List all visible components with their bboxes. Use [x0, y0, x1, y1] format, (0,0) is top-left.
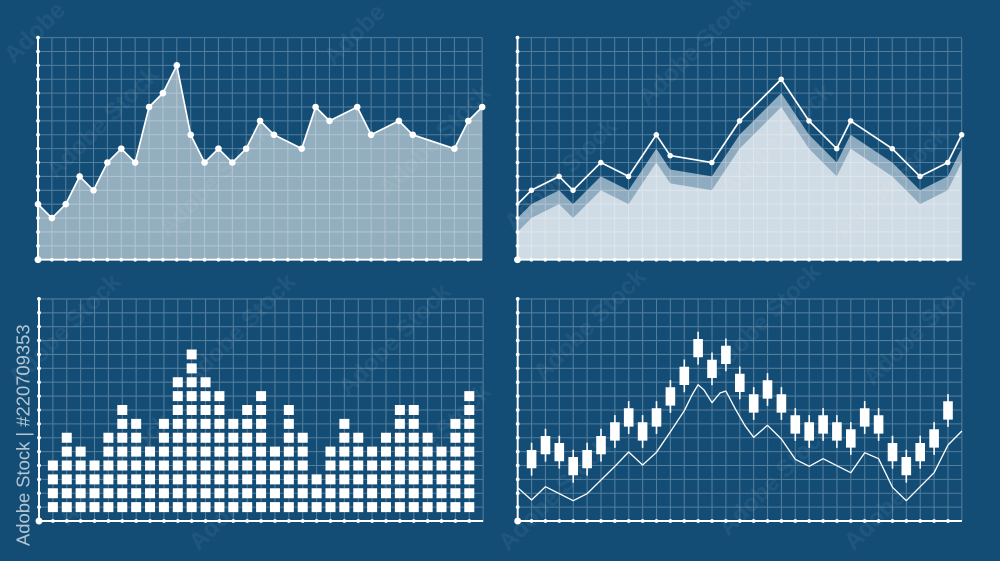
panel: candlestick chart	[514, 299, 962, 524]
watermark overlay: Adobe Stock	[715, 78, 839, 201]
trend line	[518, 385, 962, 501]
watermark overlay: Adobe Stock	[713, 418, 837, 541]
watermark overlay: Adobe Stock	[41, 61, 165, 184]
line with markers	[518, 76, 964, 204]
watermark overlay: Adobe Stock	[333, 278, 457, 401]
watermark overlay: Adobe Stock	[373, 378, 497, 501]
watermark overlay: Adobe Stock	[858, 268, 982, 391]
watermark overlay: Adobe Stock	[178, 268, 302, 391]
watermark overlay: Adobe Stock	[153, 119, 277, 242]
stacked square bars	[53, 349, 469, 512]
line with markers	[35, 62, 485, 221]
panel: area line chart	[35, 38, 485, 263]
axes	[514, 38, 962, 263]
candlestick wicks	[532, 332, 948, 483]
watermark overlay: Adobe Stock	[373, 79, 497, 202]
watermark overlay: Adobe Stock	[830, 121, 954, 244]
axes	[514, 299, 962, 524]
axes	[35, 38, 482, 263]
watermark overlay: Adobe	[184, 484, 256, 556]
panel: layered area chart	[514, 38, 964, 263]
filled area	[38, 65, 482, 260]
panel: block bar chart	[36, 299, 483, 524]
watermark overlay: Adobe Stock	[53, 408, 177, 531]
axes	[36, 299, 483, 524]
watermark overlay: Adobe	[839, 484, 911, 556]
watermark overlay: Adobe Stock	[528, 263, 652, 386]
watermark overlay: Adobe Stock	[703, 258, 827, 381]
watermark overlay: Adobe Stock	[499, 113, 623, 236]
watermark overlay: Adobe Stock	[493, 433, 617, 556]
watermark overlay: Adobe Stock	[3, 268, 127, 391]
side credit text: Adobe Stock | #220709353	[12, 324, 34, 546]
middle area layer	[518, 93, 962, 260]
watermark overlay: Adobe	[319, 0, 391, 71]
candlestick bodies	[532, 339, 948, 475]
front area layer	[518, 107, 962, 260]
